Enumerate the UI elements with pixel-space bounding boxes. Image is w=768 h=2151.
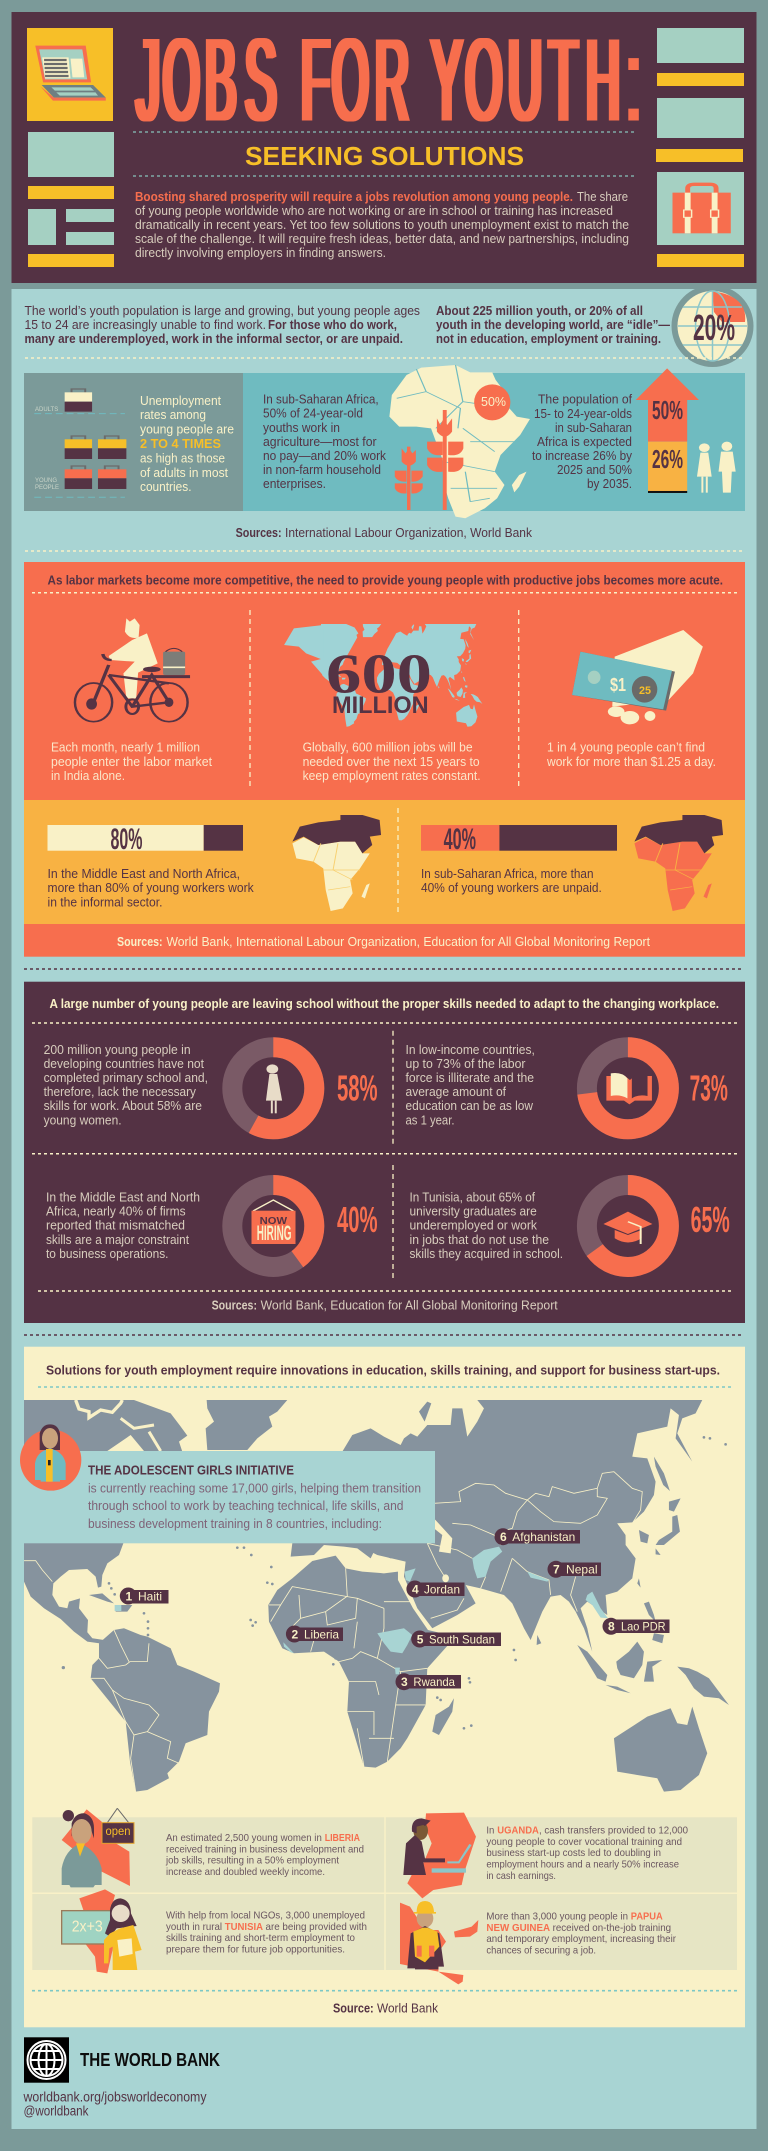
chart: growth arrow: 50% — [652, 395, 683, 425]
intro paragraph: of young people worldwide who are not working or are in school or training has increased — [135, 204, 613, 218]
intro paragraph: scale of the challenge. It will require fresh ideas, better data, and new partnerships, including — [135, 232, 629, 246]
text: Papua New Guinea: and temporary employment, increasing their — [486, 1933, 676, 1945]
text: Tunisia: skills training and short-term employment to — [166, 1932, 355, 1944]
small labels: ADULTS — [35, 407, 58, 413]
text: Papua New Guinea: PAPUA — [631, 1910, 663, 1922]
chart: donut 40%: 40% — [337, 1199, 378, 1240]
icon: now hiring sign: NOW — [260, 1215, 287, 1227]
icon: Uganda man at laptop — [403, 1813, 476, 1898]
panel: header — [12, 12, 756, 283]
text: primary school: therefore, lack the necessary — [44, 1084, 196, 1099]
text: graduates: in jobs that do not use the — [410, 1232, 549, 1247]
icon: hand with money: $1 — [610, 675, 626, 695]
text: informal sector: more than 80% of young workers work — [48, 880, 254, 895]
text: agriculture: no pay—and 20% work — [263, 448, 386, 463]
icon: Liberia woman with open sign: open — [106, 1824, 130, 1838]
text: unpaid — [421, 866, 602, 895]
panel: sub-Saharan Africa — [243, 365, 745, 518]
label: 5 South Sudan — [411, 1630, 501, 1648]
text: Papua New Guinea: received on-the-job training — [553, 1922, 671, 1934]
map: world 600 million: MILLION — [332, 692, 429, 719]
icon: Tunisia teacher with board: 2x+3 — [72, 1919, 103, 1936]
callout: Adolescent Girls Initiative: THE ADOLESCENT GIRLS INITIATIVE — [88, 1462, 294, 1478]
panel: skills — [24, 982, 745, 1323]
subtitle: SEEKING SOLUTIONS — [245, 141, 524, 171]
icon: young woman and man — [697, 442, 736, 493]
text: unemployment rates: young people are — [140, 422, 234, 436]
text: primary school: developing countries have not — [44, 1056, 204, 1071]
source bar — [24, 924, 745, 957]
panel: labor markets — [24, 562, 745, 800]
panel: unemployment rates — [24, 373, 243, 511]
text: Tunisia: TUNISIA — [225, 1921, 263, 1933]
chart: donut 40% — [232, 1185, 378, 1267]
label: 8 Lao PDR: 8 — [608, 1620, 615, 1634]
label: 4 Jordan: 4 — [412, 1582, 419, 1596]
source note — [333, 2000, 438, 2016]
label: 7 Nepal — [548, 1561, 601, 1578]
text: illiteracy: In low-income countries, — [406, 1042, 535, 1057]
text: unemployment rates: of adults in most — [140, 465, 228, 480]
highlighted countries — [115, 1547, 608, 1674]
chart: 80% bar: 80% — [110, 823, 142, 856]
icon: hand with money — [572, 630, 703, 724]
panel: solutions — [20, 1347, 745, 2027]
small labels: PEOPLE — [35, 485, 59, 491]
text: primary school: young women. — [44, 1112, 122, 1128]
heading: A large number of young people are leaving school without the proper skills needed to adapt to the changing workplace. — [50, 997, 719, 1011]
chart: donut 65% — [587, 1185, 730, 1267]
text: Liberia: job skills, resulting in a 50% employment — [165, 1854, 339, 1866]
source note: Source: — [333, 2000, 374, 2016]
text: Papua New Guinea: chances of securing a job. — [486, 1944, 596, 1956]
source bar: Sources: — [117, 934, 163, 949]
map: world 600 million — [284, 624, 482, 727]
panel: informal and unpaid workers — [24, 800, 745, 924]
text: $1.25 a day — [546, 740, 716, 769]
text: illiteracy: up to 73% of the labor — [406, 1056, 526, 1071]
text: agriculture — [263, 392, 386, 491]
label: 7 Nepal: 7 — [553, 1563, 560, 1577]
text: informal sector: In the Middle East and North Africa, — [48, 866, 240, 881]
text: unemployment rates: Unemployment — [140, 393, 221, 408]
text: graduates: In Tunisia, about 65% of — [410, 1190, 535, 1204]
text: Papua New Guinea: More than 3,000 young people in — [486, 1910, 628, 1922]
chart: 80% bar — [48, 823, 243, 856]
label: 50%: 50% — [481, 394, 506, 409]
text: India — [51, 740, 212, 783]
text: agriculture: youths work in — [263, 420, 340, 435]
callout: Adolescent Girls Initiative: is currently reaching some 17,000 girls, helping them transition — [88, 1480, 421, 1496]
map: world 600 million: 600 — [326, 644, 432, 706]
text: population: 15- to 24-year-olds — [534, 406, 632, 421]
text: Uganda — [486, 1824, 688, 1882]
text: mismatched skills: In the Middle East and North — [46, 1190, 200, 1204]
map: Africa north dark, south cream — [292, 815, 381, 911]
intro paragraph: The share — [577, 190, 628, 204]
text: Liberia — [165, 1832, 364, 1878]
text: unemployment rates: 2 TO 4 TIMES — [140, 436, 221, 451]
text: illiteracy — [406, 1042, 535, 1128]
label: 3 Rwanda: Rwanda — [413, 1675, 455, 1689]
text: Uganda: in cash earnings. — [486, 1870, 556, 1882]
text: India: Each month, nearly 1 million — [51, 740, 200, 754]
text: Papua New Guinea — [486, 1910, 676, 1956]
chart: growth arrow — [636, 368, 699, 493]
text: unemployment rates — [140, 393, 234, 494]
text: agriculture: agriculture—most for — [263, 434, 377, 449]
text: graduates: underemployed or work — [410, 1218, 537, 1232]
text: mismatched skills: to business operations. — [46, 1246, 168, 1261]
icon: Tunisia teacher with board — [62, 1889, 142, 1973]
text: Tunisia: youth in rural — [166, 1921, 222, 1933]
text: unpaid: In sub-Saharan Africa, more than — [421, 866, 594, 881]
label: 6 Afghanistan: 6 — [500, 1530, 507, 1544]
text: illiteracy: force is illiterate and the — [406, 1070, 534, 1085]
text: illiteracy: as 1 year. — [406, 1112, 454, 1128]
callout: Adolescent Girls Initiative: through school to work by teaching technical, life skills, and — [88, 1498, 404, 1513]
text block: youth population: many are underemployed, work in the informal sector, or are unpaid. — [24, 332, 403, 346]
chart: donut 58% — [232, 1047, 378, 1129]
text: Uganda: employment hours and a nearly 50% increase — [486, 1858, 679, 1870]
text: graduates: skills they acquired in school. — [410, 1246, 563, 1261]
text: agriculture: in non-farm household — [263, 462, 381, 477]
label: 5 South Sudan: 5 — [417, 1632, 424, 1646]
links: worldbank.org/jobsworldeconomy — [23, 2090, 207, 2104]
text: population: in sub-Saharan — [555, 420, 632, 435]
small islands — [62, 1436, 727, 1730]
source note: Sources: — [212, 1298, 257, 1312]
country borders — [24, 1472, 642, 1792]
source note: International Labour Organization, World Bank — [285, 525, 532, 540]
text block: idle youth: About 225 million youth, or 20% of all — [436, 304, 643, 318]
heading: Solutions for youth employment require innovations in education, skills training, and support for business start-ups. — [46, 1364, 720, 1378]
text: unemployment rates: countries. — [140, 479, 192, 494]
text: unemployment rates: as high as those — [140, 450, 225, 466]
text: global jobs — [303, 740, 481, 783]
text: Uganda: business start-up costs led to doubling in — [486, 1847, 661, 1859]
map: world — [24, 1400, 729, 1792]
text: population — [532, 392, 632, 491]
label: 6 Afghanistan — [494, 1528, 580, 1545]
links: @worldbank — [24, 2104, 89, 2118]
map: Africa north dark, south coral — [634, 815, 723, 911]
text: mismatched skills: reported that mismatched — [46, 1218, 185, 1232]
text block: youth population: For those who do work, — [268, 318, 397, 332]
text: India: people enter the labor market — [51, 754, 212, 769]
label: 8 Lao PDR: Lao PDR — [621, 1620, 666, 1634]
text: unpaid: 40% of young workers are unpaid. — [421, 880, 602, 895]
text: population: Africa is expected — [537, 434, 632, 449]
icon: young woman — [266, 1064, 282, 1113]
text: informal sector — [48, 866, 254, 910]
icon: now hiring sign — [252, 1200, 296, 1245]
icon: girl portrait — [20, 1424, 81, 1491]
text: population: 2025 and 50% — [557, 462, 632, 477]
text: global jobs: keep employment rates constant. — [303, 768, 481, 783]
text: unemployment rates: rates among — [140, 407, 206, 422]
label: 3 Rwanda: 3 — [401, 1675, 408, 1689]
text: population: by 2035. — [587, 476, 632, 491]
icon: hand with money: 25 — [639, 685, 651, 697]
text: Tunisia: are being provided with — [266, 1921, 367, 1933]
intro paragraph: directly involving employers in finding answers. — [135, 246, 386, 260]
label: 6 Afghanistan: Afghanistan — [512, 1530, 575, 1544]
text: agriculture: enterprises. — [263, 476, 326, 491]
text: population: The population of — [538, 392, 632, 406]
text: primary school: completed primary school and, — [44, 1070, 208, 1085]
label: 4 Jordan: Jordan — [424, 1582, 460, 1596]
chart: 40% bar — [421, 823, 617, 856]
text: $1.25 a day: work for more than $1.25 a day. — [546, 754, 716, 769]
text: mismatched skills: Africa, nearly 40% of firms — [46, 1204, 186, 1218]
intro paragraph — [135, 190, 629, 260]
text block: youth population: The world’s youth population is large and growing, but young people ages — [24, 304, 420, 318]
text: Tunisia: prepare them for future job opportunities. — [166, 1944, 345, 1956]
chart: growth arrow: 26% — [652, 444, 683, 474]
text: primary school: skills for work. About 58% are — [44, 1098, 202, 1113]
label: 2 Liberia — [286, 1626, 343, 1642]
text: Tunisia — [166, 1910, 367, 1956]
icon: graduation cap — [603, 1212, 652, 1244]
text: Uganda: In — [486, 1824, 495, 1836]
small labels: YOUNG — [35, 478, 57, 484]
icon: briefcase — [672, 184, 731, 233]
icon: Liberia woman with open sign — [62, 1808, 134, 1887]
source note: World Bank — [377, 2000, 438, 2016]
label: 1 Haiti: 1 — [126, 1590, 132, 1604]
text: Liberia: increase and doubled weekly income. — [166, 1866, 325, 1878]
text: Tunisia: With help from local NGOs, 3,000 unemployed — [166, 1910, 365, 1922]
text: primary school — [44, 1042, 208, 1128]
seas and channels — [76, 1400, 632, 1582]
icon: laptop — [35, 46, 106, 101]
source bar: World Bank, International Labour Organization, Education for All Global Monitoring Report — [166, 934, 650, 949]
text: primary school: 200 million young people in — [44, 1042, 191, 1057]
label: 4 Jordan — [406, 1580, 464, 1598]
icon: Papua New Guinea worker — [400, 1901, 478, 1984]
label: 1 Haiti — [120, 1588, 168, 1604]
icon: cyclist — [75, 618, 190, 722]
text: mismatched skills: skills are a major constraint — [46, 1232, 189, 1247]
chart: 40% bar: 40% — [444, 823, 476, 856]
chart: donut 65%: 65% — [691, 1199, 730, 1240]
text block: idle youth: not in education, employment or training. — [436, 332, 661, 346]
text: Uganda: young people to cover vocational training and — [486, 1836, 682, 1848]
icon: now hiring sign: HIRING — [257, 1222, 292, 1245]
icon: open book — [606, 1073, 652, 1104]
text block: idle youth — [436, 304, 670, 346]
text: Liberia: An estimated 2,500 young women in — [166, 1832, 322, 1844]
text: graduates: university graduates are — [410, 1204, 537, 1218]
icon: globe 20% — [672, 285, 754, 367]
text block: youth population: 15 to 24 are increasingly unable to find work. — [24, 318, 266, 332]
label: 5 South Sudan: South Sudan — [429, 1632, 495, 1646]
text: Papua New Guinea: NEW GUINEA — [486, 1922, 550, 1934]
chart: donut 73% — [587, 1047, 728, 1129]
label: 3 Rwanda — [396, 1673, 461, 1690]
label: 7 Nepal: Nepal — [566, 1563, 598, 1577]
label: 2 Liberia: 2 — [292, 1628, 298, 1642]
text: global jobs: Globally, 600 million jobs will be — [303, 740, 473, 754]
callout: Adolescent Girls Initiative: business development training in 8 countries, including: — [88, 1516, 382, 1531]
text: illiteracy: average amount of — [406, 1084, 506, 1099]
text block: youth population — [24, 304, 420, 346]
logo: The World Bank — [24, 2037, 221, 2083]
label: 2 Liberia: Liberia — [304, 1628, 339, 1642]
intro paragraph: Boosting shared prosperity will require a jobs revolution among young people. — [135, 190, 573, 204]
map: Africa with wheat — [389, 365, 530, 518]
chart: donut 73%: 73% — [690, 1068, 728, 1109]
text: Liberia: LIBERIA — [325, 1832, 360, 1844]
callout: Adolescent Girls Initiative — [20, 1424, 435, 1543]
intro paragraph: dramatically in recent years. Yet too few solutions to youth unemployment exist to match the — [135, 218, 629, 232]
label: 8 Lao PDR — [602, 1618, 670, 1635]
heading: As labor markets become more competitive, the need to provide young people with productive jobs becomes more acute. — [48, 574, 723, 588]
text: India: in India alone. — [51, 768, 125, 783]
text: Uganda: , cash transfers provided to 12,000 — [539, 1824, 688, 1836]
text: graduates — [410, 1190, 563, 1261]
text: illiteracy: education can be as low — [406, 1098, 534, 1113]
text block: idle youth: youth in the developing world, are “idle”— — [436, 318, 670, 332]
text: population: to increase 26% by — [532, 448, 632, 463]
text: Uganda: UGANDA — [497, 1824, 539, 1836]
title: JOBS FOR YOUTH: — [136, 16, 640, 147]
links — [23, 2090, 207, 2118]
decorative colour blocks — [27, 28, 744, 267]
small labels — [35, 407, 59, 491]
source note: World Bank, Education for All Global Monitoring Report — [261, 1298, 558, 1312]
text: informal sector: in the informal sector. — [48, 894, 162, 910]
label: 1 Haiti: Haiti — [138, 1590, 162, 1604]
text: Liberia: received training in business development and — [166, 1843, 364, 1855]
text: agriculture: In sub-Saharan Africa, — [263, 392, 379, 406]
text: agriculture: 50% of 24-year-old — [263, 406, 363, 420]
panel: country cases — [32, 1808, 737, 1984]
text: mismatched skills — [46, 1190, 200, 1261]
icon: globe 20%: 20% — [693, 307, 735, 348]
source note: Sources: — [236, 525, 282, 540]
text: global jobs: needed over the next 15 years to — [303, 754, 480, 769]
icon: briefcases adults vs young people — [34, 389, 126, 497]
chart: donut 58%: 58% — [337, 1068, 378, 1109]
text: $1.25 a day: 1 in 4 young people can’t find — [547, 740, 705, 754]
logo: The World Bank: THE WORLD BANK — [80, 2049, 221, 2070]
